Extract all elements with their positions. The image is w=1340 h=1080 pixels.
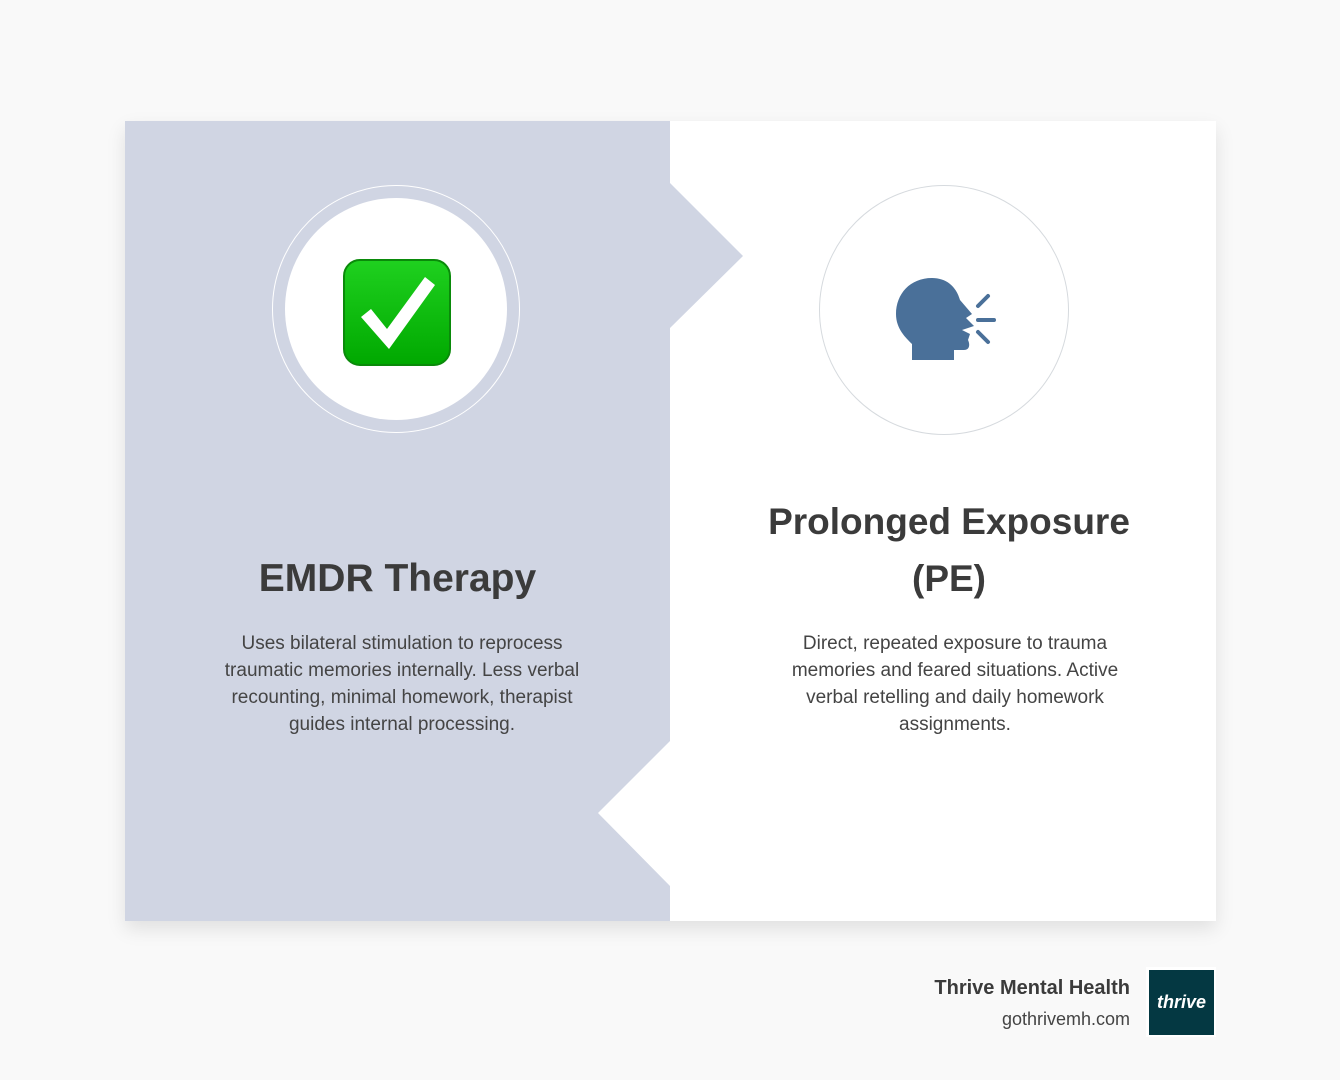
heading: EMDR Therapy: EMDR Therapy bbox=[259, 557, 536, 600]
left panel background bbox=[125, 121, 743, 921]
heading: Prolonged Exposure (PE): (PE) bbox=[912, 558, 986, 599]
footer brand text bbox=[934, 977, 1130, 1029]
footer brand text: Thrive Mental Health bbox=[934, 977, 1130, 999]
logo: thrive: thrive bbox=[1157, 992, 1206, 1012]
panel: EMDR bbox=[225, 185, 579, 735]
icon: checkmark circle bbox=[272, 185, 520, 433]
text: PE description: Direct, repeated exposure to trauma memories and feared situations. Active verbal retelling and daily homework assignments. bbox=[792, 633, 1118, 735]
card bbox=[125, 121, 1216, 921]
logo: thrive bbox=[1146, 967, 1216, 1037]
heading: Prolonged Exposure (PE): Prolonged Exposure bbox=[768, 501, 1130, 542]
footer brand text: gothrivemh.com bbox=[1002, 1009, 1130, 1029]
text: EMDR description: Uses bilateral stimulation to reprocess traumatic memories internally. Less verbal recounting, minimal homework, therapist guides internal processing. bbox=[225, 633, 579, 735]
heading: Prolonged Exposure (PE) bbox=[768, 501, 1130, 599]
icon: speaking head circle bbox=[819, 185, 1069, 435]
panel: Prolonged Exposure bbox=[768, 185, 1130, 735]
